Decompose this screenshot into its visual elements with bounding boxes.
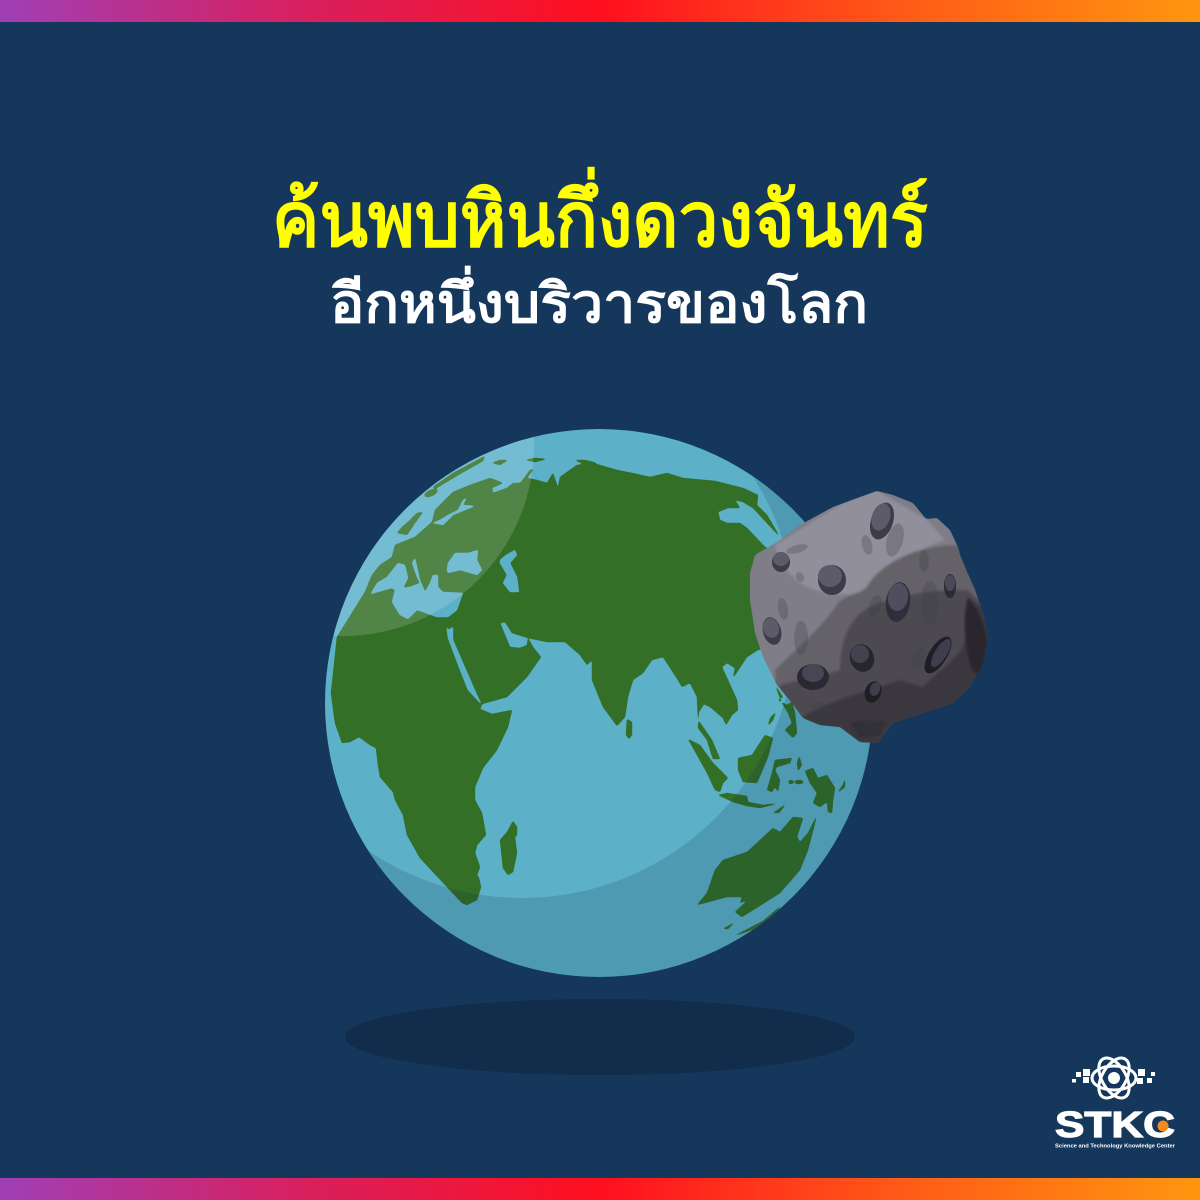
logo orange dot <box>1158 1120 1168 1132</box>
philippines <box>775 685 797 738</box>
sulawesi <box>767 758 792 792</box>
red sea <box>446 623 482 705</box>
sumatra <box>688 739 728 792</box>
globe <box>325 429 870 977</box>
bottom gradient bar <box>0 1178 1200 1200</box>
australia <box>697 815 817 917</box>
title <box>272 166 928 334</box>
arctic islands <box>492 460 508 465</box>
rock base <box>750 491 988 743</box>
asteroid <box>750 491 988 743</box>
atom icon <box>1092 1053 1136 1103</box>
black sea <box>447 550 482 575</box>
madagascar <box>500 821 517 875</box>
eurasia and africa <box>331 463 790 905</box>
java <box>718 793 780 808</box>
rock shading <box>774 491 988 743</box>
borneo <box>738 735 773 783</box>
mediterranean <box>367 558 463 619</box>
ocean <box>325 429 873 977</box>
greenland edge <box>433 456 485 489</box>
craters <box>760 500 957 705</box>
united kingdom <box>397 512 423 535</box>
iceland <box>424 488 438 498</box>
title line 1: ค้นพบหินกึ่งดวงจันทร์ <box>272 166 928 263</box>
new zealand <box>724 923 734 930</box>
STKC wordmark: STKC <box>1055 1104 1175 1145</box>
globe highlight <box>334 437 534 636</box>
sri lanka <box>626 719 632 739</box>
inland seas <box>367 492 519 705</box>
STKC logo <box>1055 1053 1176 1150</box>
new guinea <box>805 768 835 813</box>
title line 2: อีกหนึ่งบริวารของโลก <box>330 265 868 334</box>
globe ground shadow <box>345 999 855 1075</box>
faint craters <box>776 522 939 736</box>
globe shadow crescent <box>369 476 870 977</box>
rock body <box>750 491 988 743</box>
top gradient bar <box>0 0 1200 22</box>
logo tagline: Science and Technology Knowledge Center <box>1055 1144 1176 1150</box>
landmasses <box>331 456 845 937</box>
pixel squares <box>1072 1069 1155 1084</box>
baltic sea <box>432 492 475 525</box>
caspian sea <box>500 550 519 592</box>
